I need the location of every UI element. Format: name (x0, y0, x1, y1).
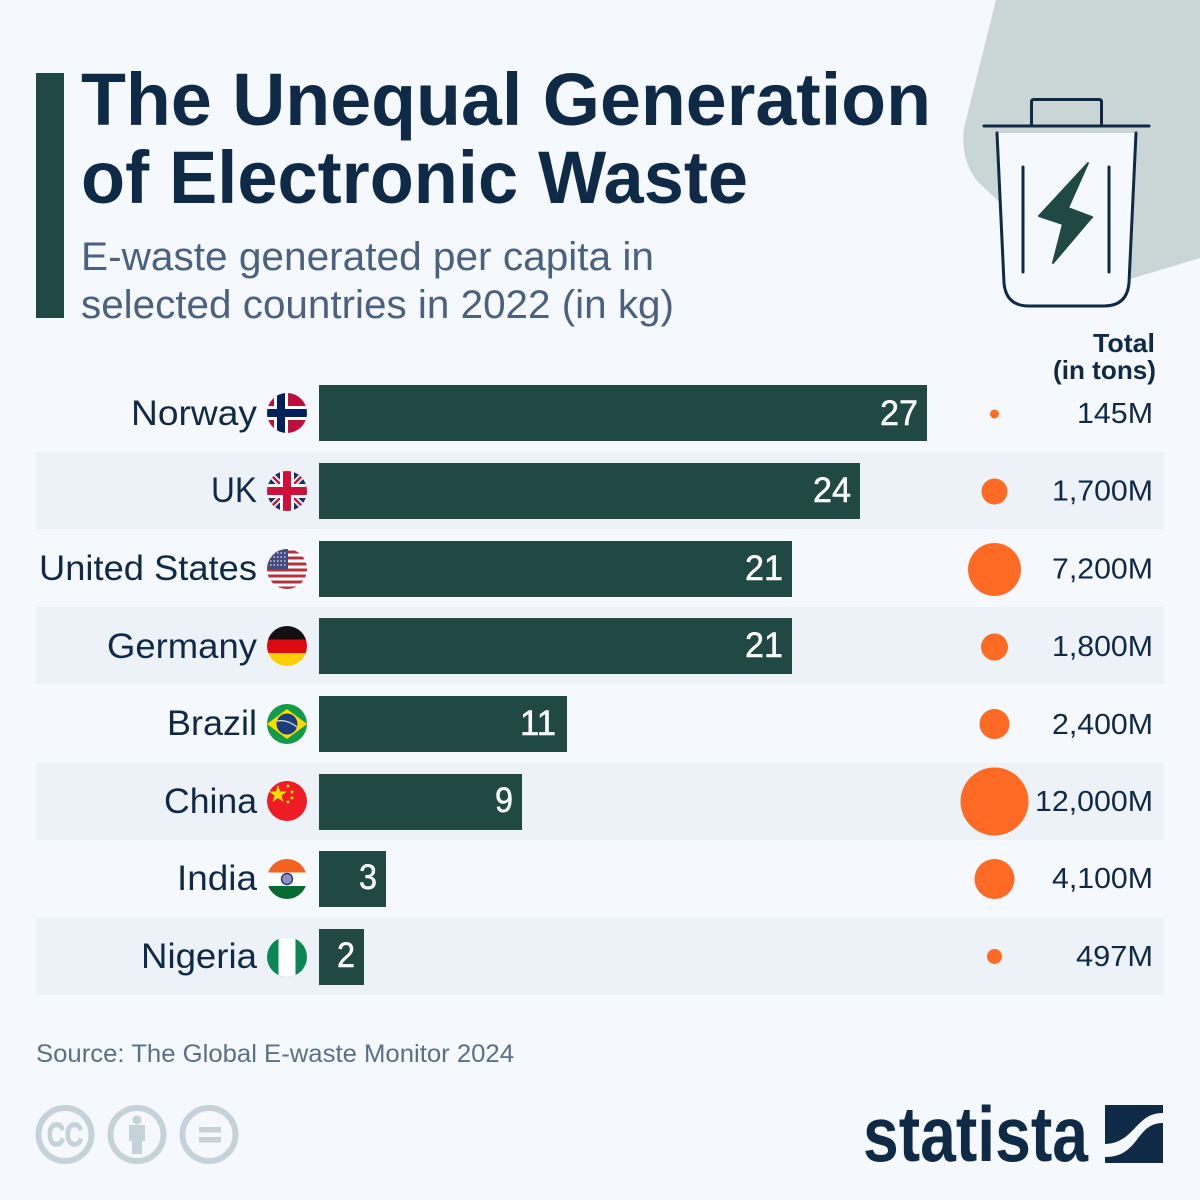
row: Norway: 27 (880, 394, 918, 433)
icon: creative commons: CC (47, 1116, 83, 1153)
icon: attribution (110, 1108, 164, 1161)
row: Norway: Norway (131, 394, 258, 433)
row: Norway: 145M (1077, 398, 1153, 430)
row: India: 3 (359, 858, 377, 897)
row: UK: 1,700M (1052, 476, 1153, 508)
row: United States: 7,200M (1052, 554, 1153, 586)
row: UK (214, 463, 1150, 519)
statista wordmark: statista (863, 1090, 1089, 1178)
row: China: 12,000M (1035, 786, 1153, 818)
row: Brazil: Brazil (167, 704, 257, 743)
title: of Electronic Waste (81, 136, 748, 219)
source: Source: The Global E-waste Monitor 2024 (36, 1040, 514, 1068)
icon: statista logo mark (1105, 1105, 1163, 1163)
row: India: 4,100M (1052, 863, 1153, 895)
row: United States: 21 (745, 549, 783, 588)
row: Germany: Germany (107, 627, 258, 666)
title accent bar (36, 73, 64, 318)
row: Germany (108, 618, 1150, 674)
subtitle: E-waste generated per capita in (81, 235, 654, 279)
column header: total in tons: Total (1093, 328, 1155, 358)
row: China: 9 (495, 781, 513, 820)
row: UK: 24 (813, 471, 851, 510)
row: UK: UK (211, 471, 257, 510)
column header: total in tons (1053, 328, 1156, 385)
title: The Unequal Generation (81, 58, 931, 141)
subtitle (81, 235, 674, 327)
row: Brazil: 11 (520, 704, 556, 743)
subtitle: selected countries in 2022 (in kg) (81, 283, 674, 327)
row: Nigeria: 497M (1076, 941, 1153, 973)
row: India: India (177, 859, 258, 898)
row: Norway (131, 385, 1153, 441)
icon: trash bin with lightning bolt (984, 100, 1149, 306)
column header: total in tons: (in tons) (1053, 355, 1156, 385)
title (81, 58, 931, 219)
row: United States (39, 541, 1153, 597)
row: Nigeria: 2 (337, 936, 355, 975)
icon: creative commons (38, 1108, 92, 1161)
background blob (963, 0, 1200, 290)
row: China: China (164, 782, 258, 821)
row: Brazil: 2,400M (1052, 709, 1153, 741)
row: India (177, 851, 1153, 907)
row: Nigeria: Nigeria (141, 937, 258, 976)
row: Germany: 1,800M (1052, 631, 1153, 663)
icon: no derivatives (182, 1108, 236, 1161)
row: Nigeria (144, 929, 1150, 985)
row: United States: United States (39, 549, 257, 588)
row: China (166, 768, 1151, 836)
row: Brazil (167, 696, 1153, 752)
row: Germany: 21 (745, 626, 783, 665)
